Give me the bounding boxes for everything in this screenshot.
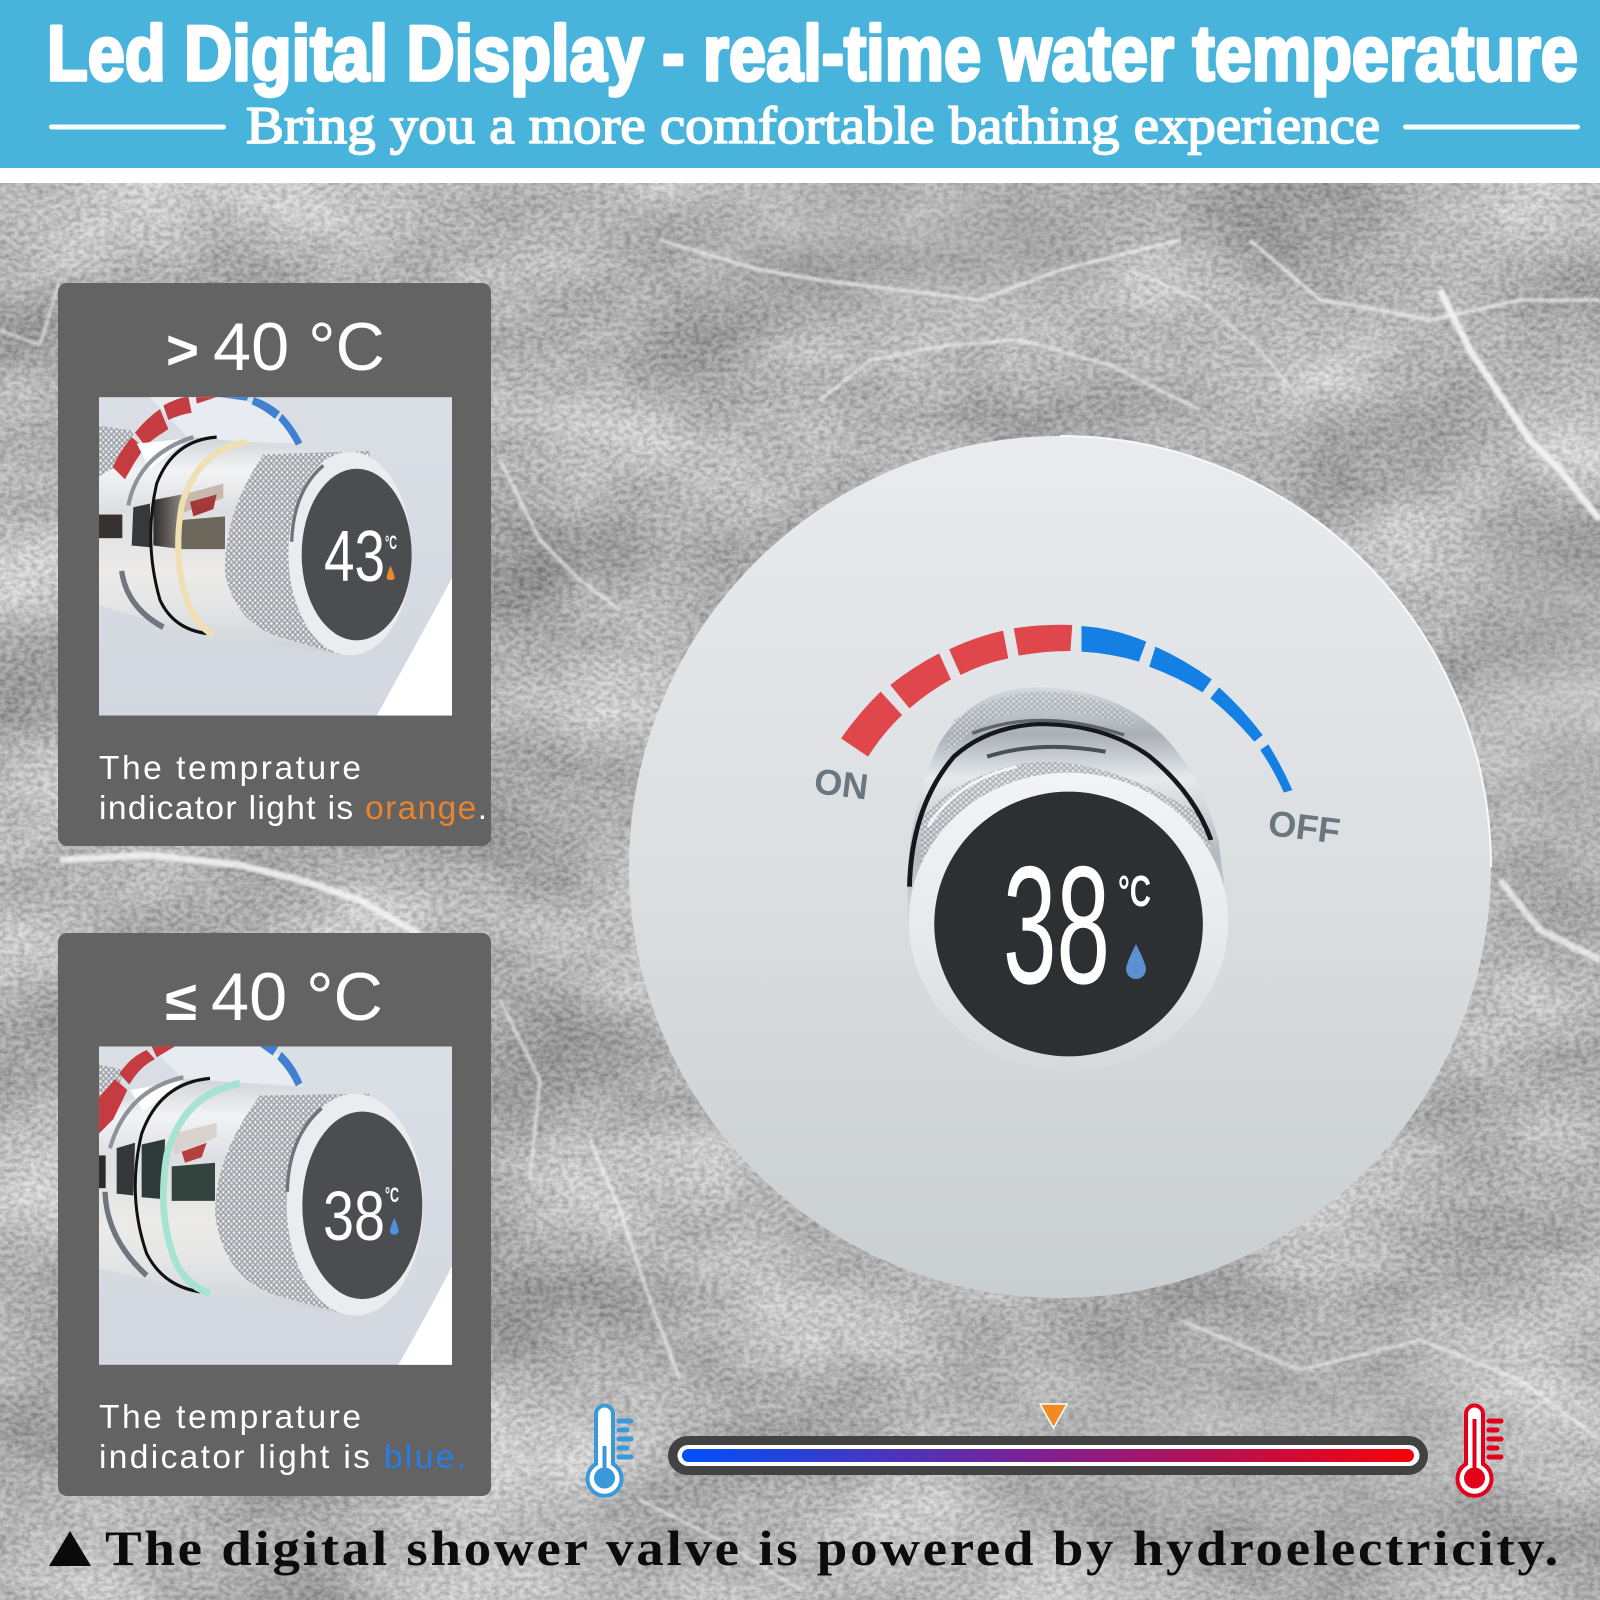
chrome reflections [99, 438, 225, 549]
bezel [287, 1094, 423, 1315]
red scale segments [841, 625, 1072, 757]
footnote text: The digital shower valve is powered by hydroelectricity. [105, 1520, 1561, 1576]
display face [934, 792, 1203, 1056]
panel heading: 40 °C [211, 959, 383, 1035]
main display readout: °C [1118, 867, 1151, 916]
caption second line: indicator light is blue. [99, 1439, 466, 1476]
footnote [49, 1520, 1561, 1576]
display face [302, 469, 412, 640]
ON label: ON [812, 760, 871, 808]
temperature dial scale [841, 625, 1292, 793]
photo: knob close-up 43 [99, 396, 452, 716]
chrome reflections [99, 1081, 217, 1201]
header band [0, 0, 1600, 183]
black ring [135, 1078, 210, 1292]
readout 43: 43 [324, 517, 385, 597]
caption: The temprature [99, 1399, 361, 1436]
drop icon [390, 1218, 399, 1235]
caption second line: indicator light is orange. [99, 790, 487, 827]
panel heading: 40 °C [213, 309, 385, 385]
warm indicator ring [178, 442, 247, 635]
temperature gradient bar [668, 1436, 1428, 1475]
OFF label: OFF [1266, 802, 1342, 852]
chrome knob [908, 687, 1229, 1071]
subtitle: Bring you a more comfortable bathing experience [246, 97, 1380, 155]
round wall plate [629, 436, 1491, 1298]
drop icon [387, 565, 395, 580]
bezel [288, 452, 412, 655]
panel: above 40 degrees [58, 283, 491, 846]
panel heading: ≤ [165, 969, 197, 1032]
drop icon [1126, 944, 1146, 979]
triangle bullet [49, 1531, 91, 1566]
orange marker triangle [1040, 1404, 1067, 1428]
knob bezel [909, 773, 1228, 1071]
black ring [151, 437, 217, 633]
blue scale segments [1082, 626, 1292, 793]
cold thermometer icon [587, 1406, 631, 1496]
photo: knob close-up 38 [99, 1046, 452, 1365]
knurled grip [225, 451, 370, 655]
panel: 40 degrees or below [58, 933, 491, 1496]
knurled grip [215, 1094, 370, 1314]
caption: The temprature [99, 750, 361, 787]
main display readout: 38 [1003, 831, 1110, 1019]
green indicator ring [163, 1083, 240, 1293]
readout 38: °C [385, 1184, 399, 1207]
display face [302, 1111, 422, 1299]
readout 38: 38 [323, 1177, 385, 1255]
hot thermometer icon [1458, 1406, 1501, 1496]
panel heading: > [166, 318, 199, 381]
readout 43: °C [385, 533, 397, 554]
